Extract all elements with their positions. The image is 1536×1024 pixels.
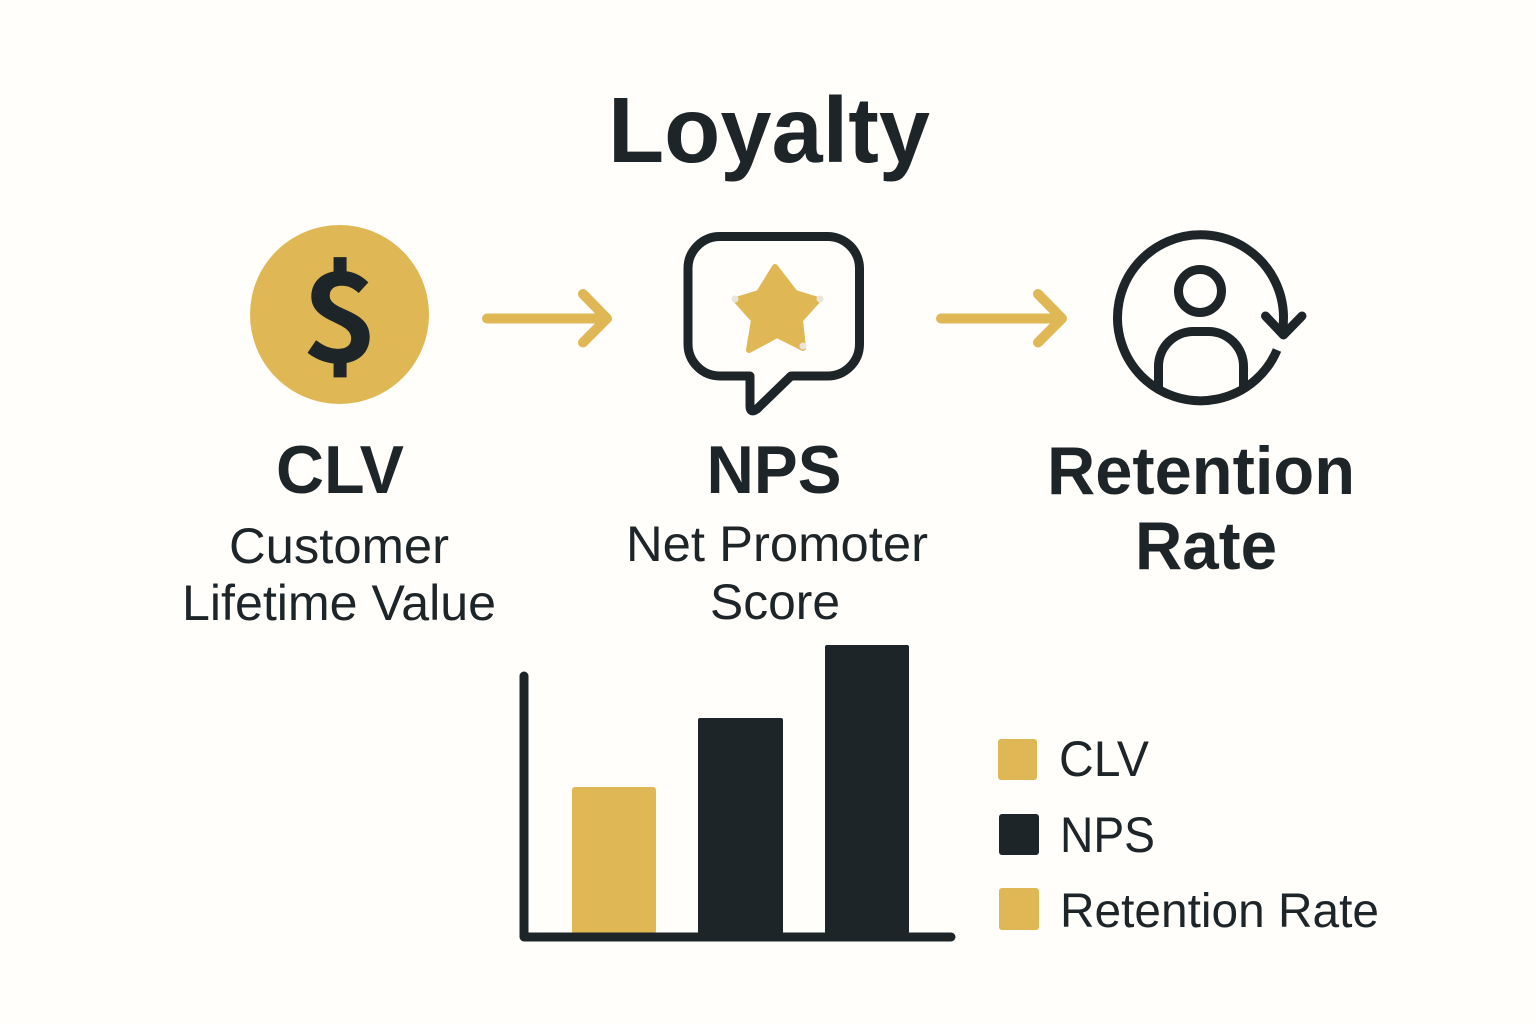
label: Retention Rate: Rate	[1135, 508, 1277, 584]
icon: dollar coin: $	[301, 218, 379, 398]
title: Loyalty	[608, 78, 930, 182]
arrow: CLV to NPS	[487, 294, 607, 342]
label: Retention Rate: Retention	[1047, 433, 1355, 509]
label: Retention Rate	[1047, 433, 1355, 584]
label: NPS: NPS	[706, 432, 842, 508]
text: Net Promoter Score: Score	[710, 574, 840, 630]
label: CLV	[182, 432, 496, 631]
legend item: NPS: NPS	[1060, 807, 1155, 863]
legend item: CLV	[998, 731, 1150, 787]
bar chart	[524, 645, 951, 937]
text: Net Promoter Score: Net Promoter	[626, 516, 928, 572]
label: NPS	[626, 432, 928, 630]
text: Customer Lifetime Value	[182, 518, 496, 631]
legend	[998, 731, 1379, 938]
text: Customer Lifetime Value: Lifetime Value	[182, 575, 496, 631]
text: Customer Lifetime Value: Customer	[229, 518, 449, 574]
legend item: Retention Rate: Retention Rate	[1060, 885, 1379, 938]
chart axes	[524, 676, 951, 937]
icon: person with retention loop	[1118, 235, 1302, 401]
arrow: NPS to Retention	[941, 294, 1062, 342]
bar: CLV	[572, 787, 656, 934]
label: CLV: CLV	[276, 432, 404, 508]
bar: Retention Rate	[825, 645, 909, 934]
legend item: CLV: CLV	[1059, 731, 1150, 787]
bar: NPS	[698, 718, 783, 934]
icon: speech bubble with star	[688, 236, 860, 411]
text: Net Promoter Score	[626, 516, 928, 630]
legend item: NPS	[999, 807, 1155, 863]
icon: dollar coin	[250, 218, 429, 404]
